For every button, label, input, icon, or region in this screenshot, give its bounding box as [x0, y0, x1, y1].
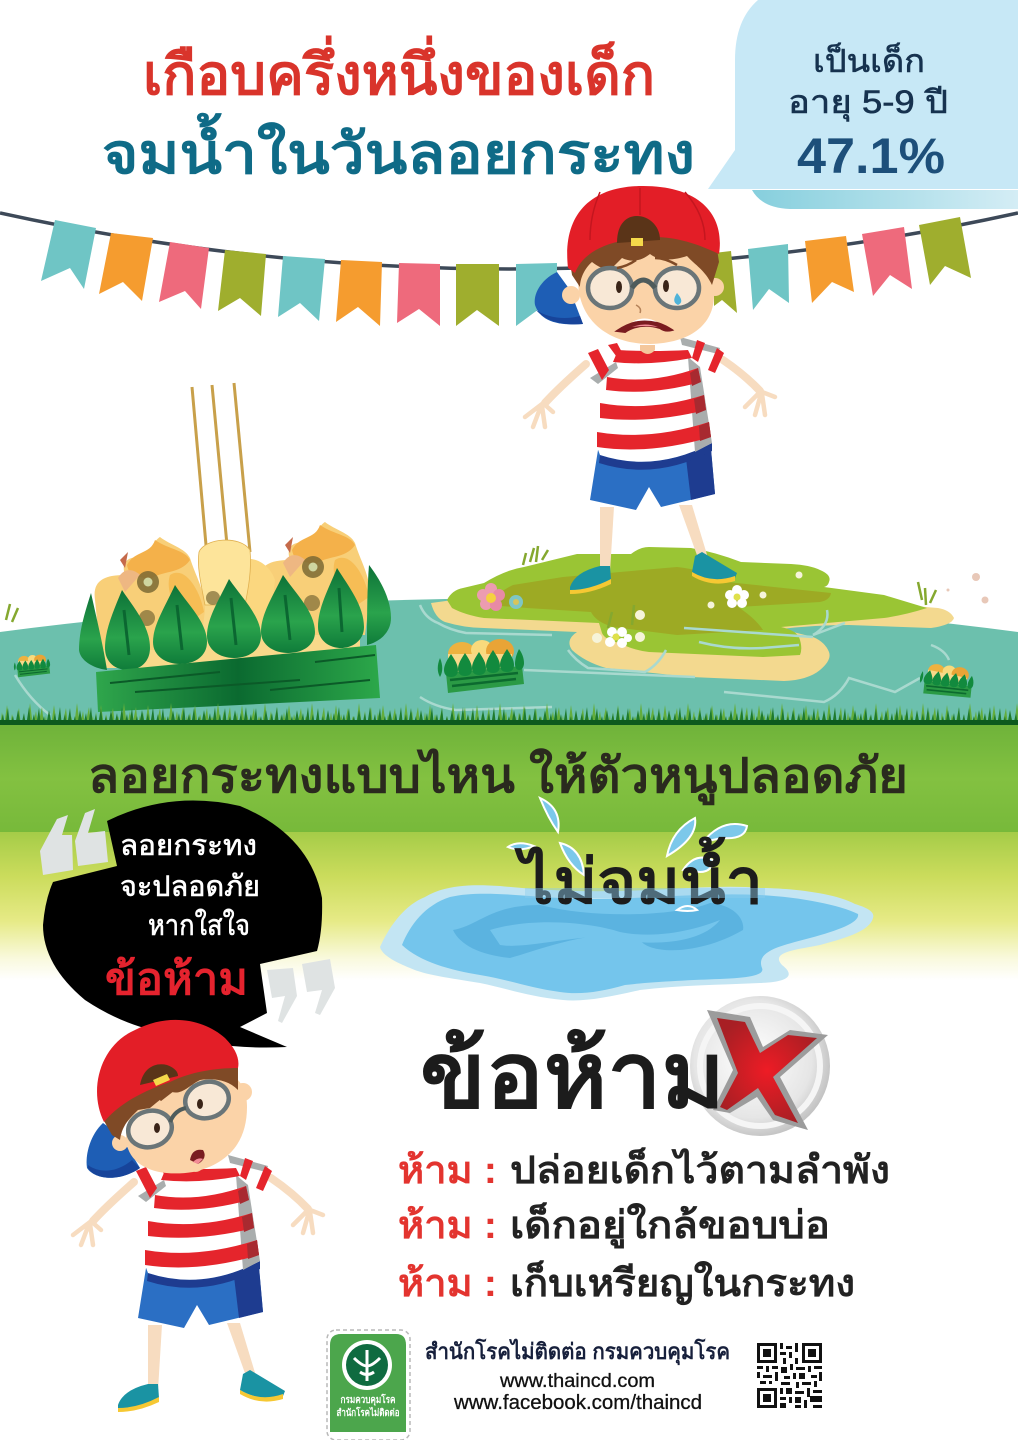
item 3: ห้าม : — [398, 1263, 497, 1305]
face — [578, 240, 714, 344]
bubble text: ลอยกระทง — [120, 830, 257, 862]
footer organisation text — [425, 1338, 730, 1414]
item 2 — [398, 1202, 830, 1249]
pond — [0, 598, 1018, 725]
cap brim — [535, 272, 583, 324]
item 2: ห้าม : — [398, 1205, 497, 1247]
item 1 — [398, 1147, 890, 1192]
eyes — [616, 280, 669, 293]
ears — [562, 278, 724, 304]
footer organisation text: www.thaincd.com — [499, 1371, 655, 1392]
QR code — [757, 1343, 822, 1408]
icon: pink flower — [477, 583, 505, 611]
open quote — [40, 809, 108, 875]
item 1: ห้าม : — [398, 1150, 497, 1192]
icon: white flower — [725, 585, 749, 608]
bubble text — [105, 830, 260, 1004]
small krathong center — [438, 639, 524, 693]
hair — [103, 1062, 238, 1140]
title — [102, 35, 695, 185]
glasses — [588, 268, 699, 308]
boy crying — [525, 186, 775, 594]
small krathong right — [917, 659, 976, 703]
bunting flags — [0, 213, 1018, 326]
logo: department badge: สำนักโรคไม่ติดต่อ — [336, 1406, 400, 1419]
heading: safe krathong: ลอยกระทงแบบไหน ให้ตัวหนูปลอดภัย — [88, 747, 908, 806]
bubble text: จะปลอดภัย — [120, 871, 260, 903]
speech bubble — [40, 801, 335, 1048]
callout bubble: age 5-9: 47.1% — [797, 128, 945, 184]
red cap — [567, 186, 720, 273]
callout bubble: age 5-9: อายุ 5-9 ปี — [788, 84, 948, 122]
glasses — [124, 1077, 233, 1152]
krathong base — [96, 645, 380, 712]
logo: department badge: กรมควบคุมโรค — [340, 1393, 396, 1406]
icon: blue flower — [509, 595, 523, 609]
icon: red X in ring — [690, 996, 830, 1136]
cap brim — [87, 1123, 140, 1178]
prohibition list — [398, 1147, 890, 1305]
water overlay on text — [525, 888, 765, 898]
green band — [0, 725, 1018, 833]
mouth — [190, 1150, 205, 1164]
tear — [674, 293, 681, 305]
nose — [636, 305, 640, 313]
fade background — [0, 832, 1018, 980]
footer organisation text: สำนักโรคไม่ติดต่อ กรมควบคุมโรค — [425, 1338, 730, 1366]
close quote — [267, 959, 335, 1023]
flowers — [95, 522, 370, 668]
title: เกือบครึ่งหนึ่งของเด็ก — [143, 35, 655, 106]
face — [126, 1068, 247, 1173]
icon: daisy cluster — [592, 610, 645, 648]
island — [6, 546, 954, 681]
eyebrow — [160, 1082, 192, 1100]
icon: small white flowers — [708, 572, 802, 608]
footer organisation text: www.facebook.com/thaincd — [453, 1392, 702, 1414]
icon: water splash drops — [508, 798, 747, 911]
logo: department badge — [327, 1330, 410, 1440]
boy speaking — [73, 1020, 323, 1412]
callout bubble: age 5-9: เป็นเด็ก — [813, 42, 925, 79]
faint flowers — [946, 573, 988, 604]
banana leaf petals — [79, 565, 391, 670]
heading: no drowning: ไม่จมน้ำ — [514, 836, 763, 917]
bubble text: ข้อห้าม — [105, 955, 248, 1004]
bubble text: หากใสใจ — [148, 908, 250, 942]
grass strip — [0, 702, 1018, 726]
small krathong left — [14, 655, 50, 677]
water ripples — [15, 605, 949, 715]
hair — [570, 235, 719, 287]
incense sticks — [192, 383, 250, 552]
item 2: เด็กอยู่ใกล้ขอบบ่อ — [510, 1202, 830, 1249]
heading: prohibitions: ข้อห้าม — [420, 1025, 725, 1127]
callout bubble: age 5-9 — [708, 0, 1018, 209]
ears — [112, 1083, 252, 1151]
red cap — [97, 1020, 238, 1122]
eyebrows — [617, 258, 677, 268]
large krathong — [79, 383, 391, 712]
item 3: เก็บเหรียญในกระทง — [510, 1260, 855, 1305]
mouth — [617, 318, 672, 332]
puddle — [380, 885, 873, 1000]
eyes — [154, 1099, 203, 1133]
title: จมน้ำในวันลอยกระทง — [102, 113, 695, 185]
item 3 — [398, 1260, 855, 1305]
item 1: ปล่อยเด็กไว้ตามลำพัง — [510, 1147, 890, 1192]
